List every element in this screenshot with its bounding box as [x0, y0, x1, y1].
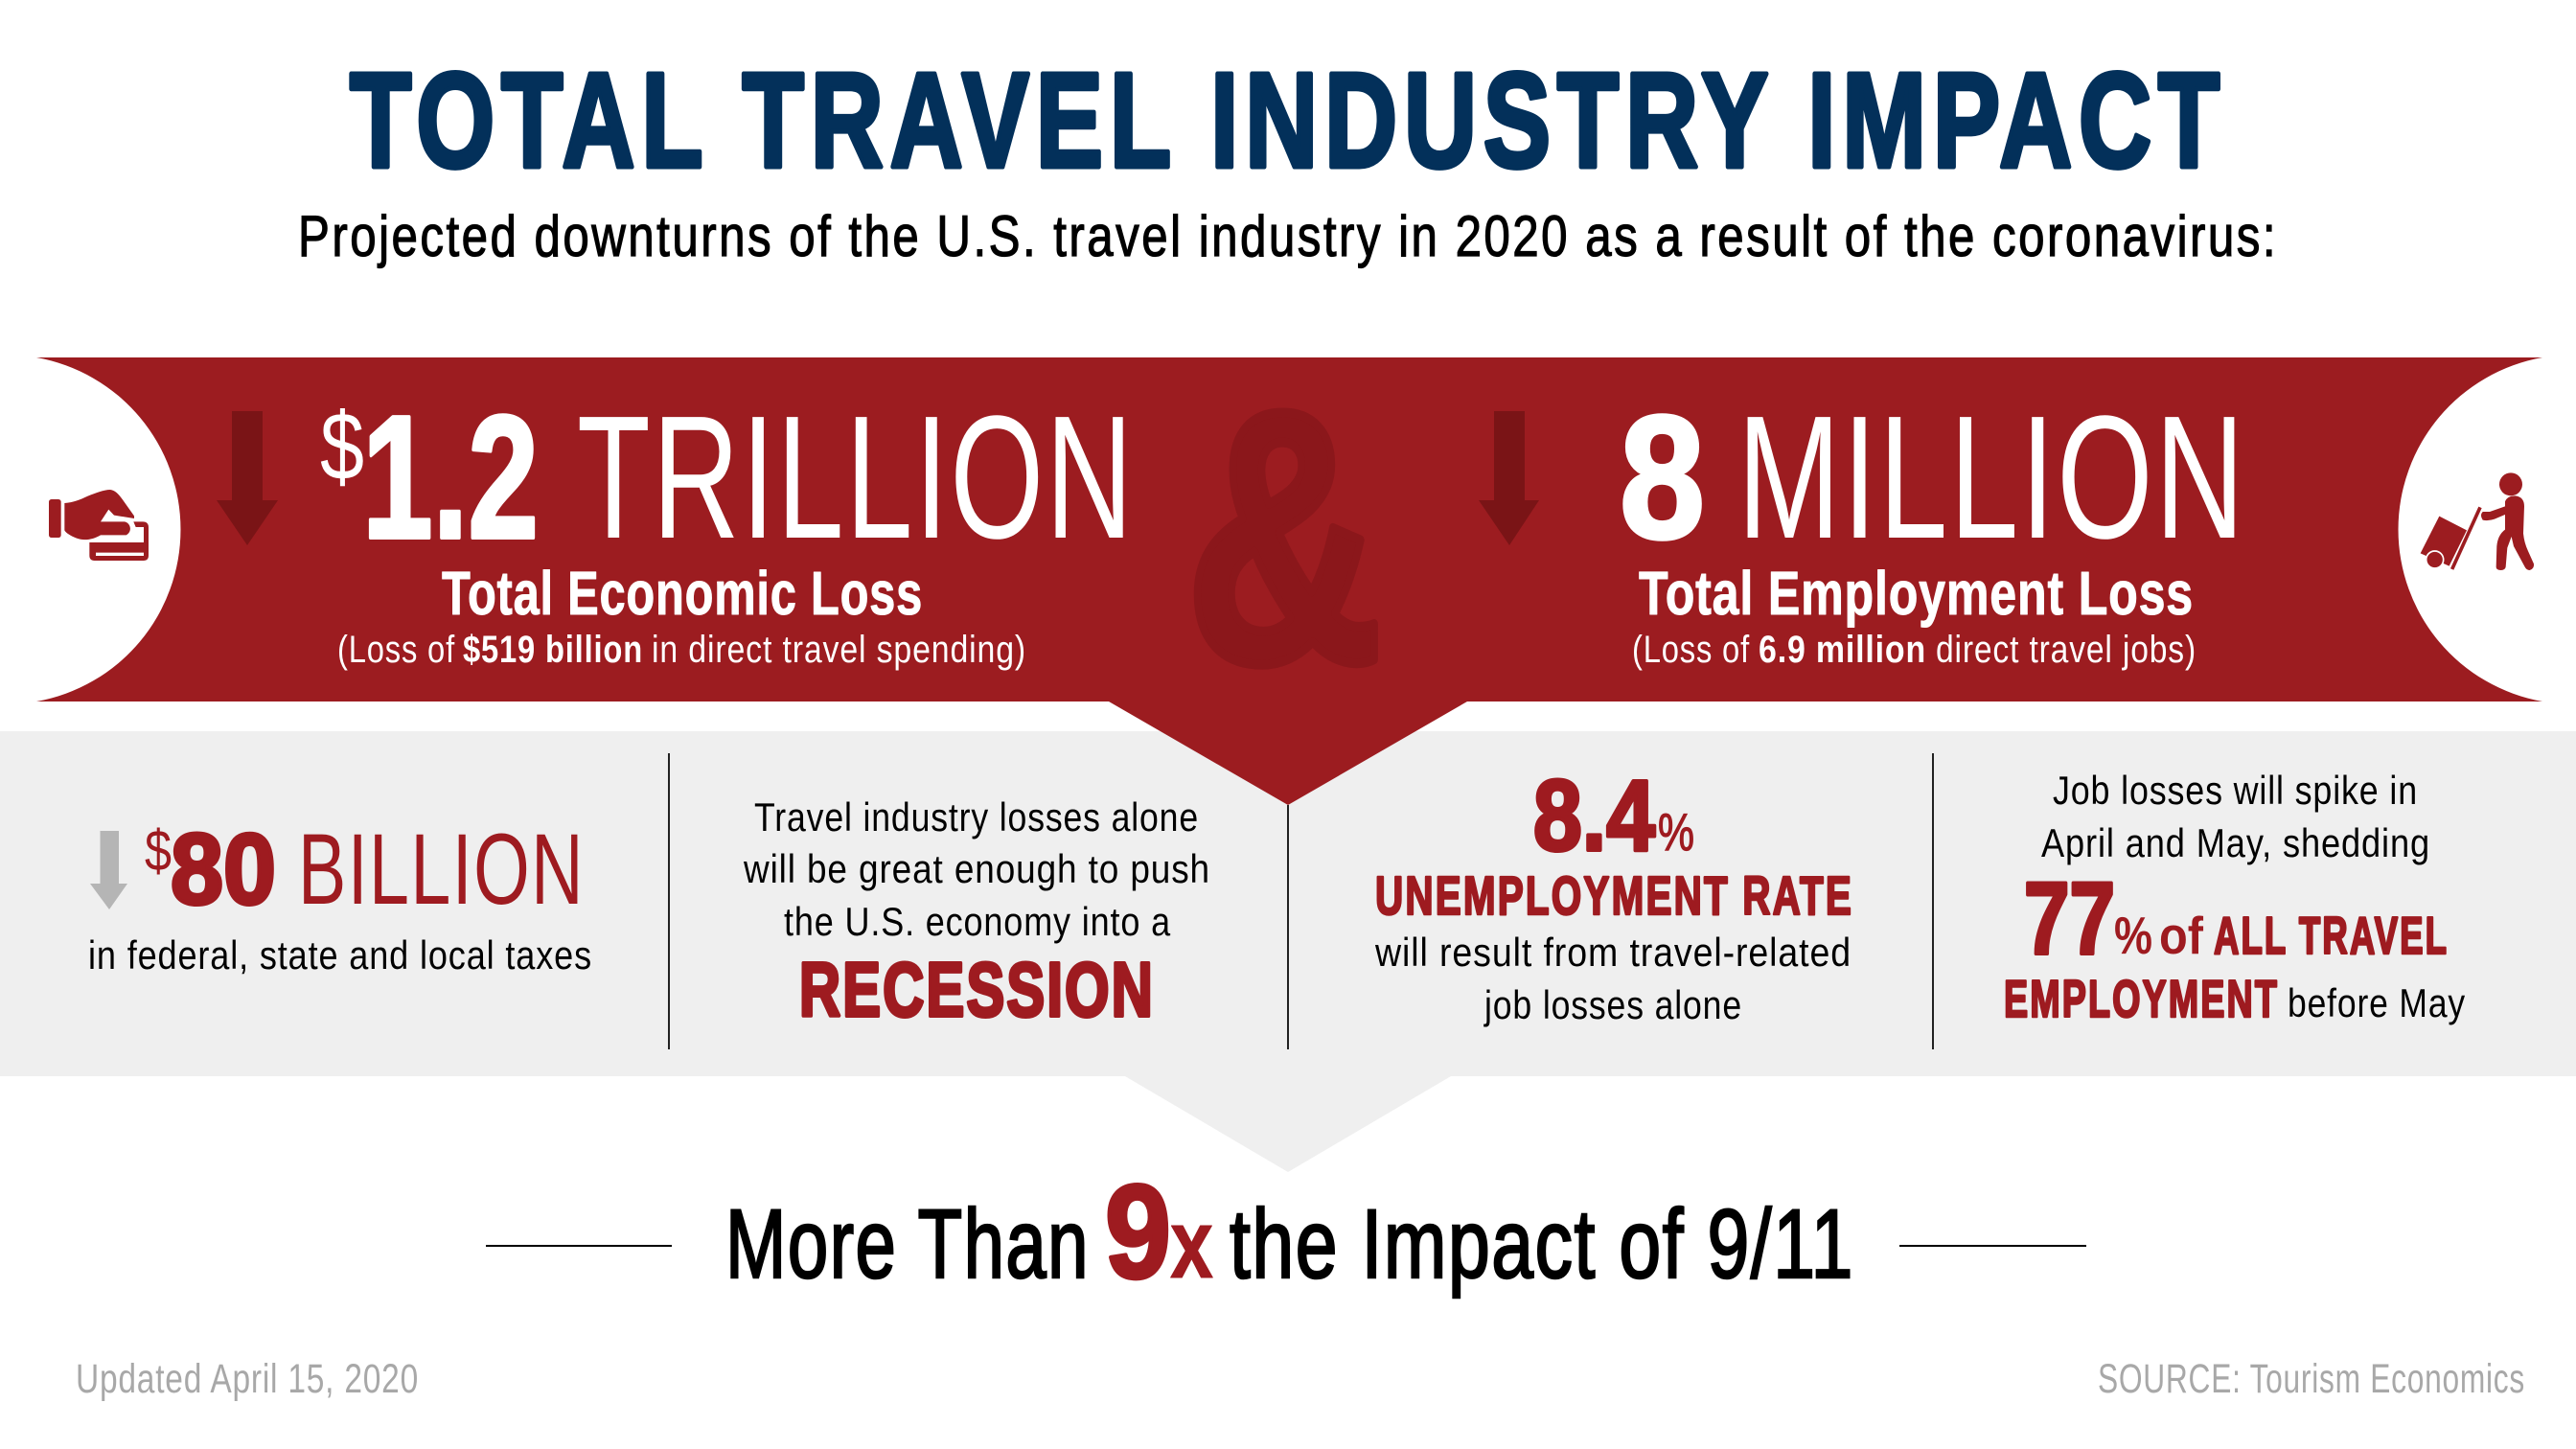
heading: unemployment rate: UNEMPLOYMENT RATE — [1375, 865, 1853, 927]
icon: hand with credit card — [49, 490, 149, 561]
footer: update date: Updated April 15, 2020 — [76, 1356, 419, 1402]
text: federal, state and local taxes: in federal, state and local taxes — [88, 932, 592, 978]
note: direct travel jobs: (Loss of — [1632, 629, 1750, 671]
stat: 8 million: MILLION — [1737, 379, 2246, 575]
heading: total employment loss: Total Employment Loss — [1639, 559, 2194, 628]
note: direct travel spending — [337, 629, 1026, 671]
text: recession statement: will be great enough to push — [743, 846, 1210, 891]
note: direct travel jobs — [1632, 629, 2196, 671]
text: recession statement: Travel industry losses alone — [754, 794, 1199, 840]
text: before May: before May — [2288, 980, 2466, 1025]
panel: secondary statistics band — [0, 731, 2576, 1172]
note: direct travel jobs: direct travel jobs) — [1936, 629, 2196, 671]
text: unemployment note: will result from travel-related — [1374, 930, 1852, 975]
stat: 77 percent of all travel employment — [2004, 861, 2449, 1028]
emphasis: recession: RECESSION — [799, 947, 1155, 1032]
stat: 8.4 percent: % — [1658, 802, 1694, 862]
rule: left of conclusion — [486, 1245, 672, 1247]
stat: 1.2 trillion: 1.2 — [362, 379, 539, 575]
conclusion: more than 9x the impact of 9/11 — [725, 1158, 1854, 1306]
heading: total economic loss: Total Economic Loss — [442, 559, 923, 628]
conclusion: more than 9x the impact of 9/11: 9 — [1105, 1158, 1171, 1306]
stat: 77 percent of all travel employment: % — [2114, 906, 2152, 965]
text: unemployment note: job losses alone — [1483, 982, 1742, 1027]
stat: 8 million: 8 — [1620, 379, 1705, 575]
note: direct travel spending: (Loss of — [337, 629, 455, 671]
text: recession statement — [743, 794, 1210, 944]
stat: 77 percent of all travel employment: EMPLOYMENT — [2004, 969, 2279, 1028]
text: recession statement: the U.S. economy into a — [784, 899, 1171, 944]
panel: red headline banner — [36, 357, 2542, 805]
text: job losses intro — [2041, 768, 2430, 865]
stat: 1.2 trillion: TRILLION — [577, 379, 1135, 575]
ampersand watermark: & — [1185, 337, 1383, 738]
conclusion: more than 9x the impact of 9/11: x — [1170, 1189, 1213, 1299]
divider — [1287, 805, 1289, 1049]
stat: 1.2 trillion — [320, 379, 1135, 575]
text: job losses intro: April and May, shedding — [2041, 820, 2430, 865]
divider — [1932, 753, 1934, 1049]
stat: 80 billion: BILLION — [298, 814, 585, 926]
stat: 77 percent of all travel employment: 77 — [2024, 861, 2115, 976]
stat: 8 million — [1620, 379, 2246, 575]
icon: person pulling luggage cart — [2421, 472, 2534, 570]
arrow: economic loss down — [217, 411, 278, 545]
stat: 80 billion — [145, 814, 585, 926]
stat: 80 billion: $ — [145, 818, 172, 883]
stat: 77 percent of all travel employment: of — [2159, 906, 2204, 965]
arrow: employment loss down — [1479, 411, 1539, 545]
note: direct travel spending: in direct travel spending) — [652, 629, 1026, 671]
stat: 77 percent of all travel employment: ALL TRAVEL — [2214, 906, 2449, 965]
stat: 80 billion: 80 — [171, 814, 276, 926]
text: job losses intro: Job losses will spike in — [2053, 768, 2418, 813]
conclusion: more than 9x the impact of 9/11: More Than — [725, 1189, 1090, 1299]
note: direct travel jobs: 6.9 million — [1759, 629, 1926, 671]
text: unemployment note — [1374, 930, 1852, 1027]
rule: right of conclusion — [1899, 1245, 2086, 1247]
stat: 1.2 trillion: $ — [320, 393, 364, 500]
note: direct travel spending: $519 billion — [463, 629, 643, 671]
arrow: taxes down — [90, 831, 127, 909]
divider — [668, 753, 670, 1049]
stat: 8.4 percent: 8.4 — [1533, 760, 1655, 872]
conclusion: more than 9x the impact of 9/11: the Impact of 9/11 — [1230, 1189, 1854, 1299]
